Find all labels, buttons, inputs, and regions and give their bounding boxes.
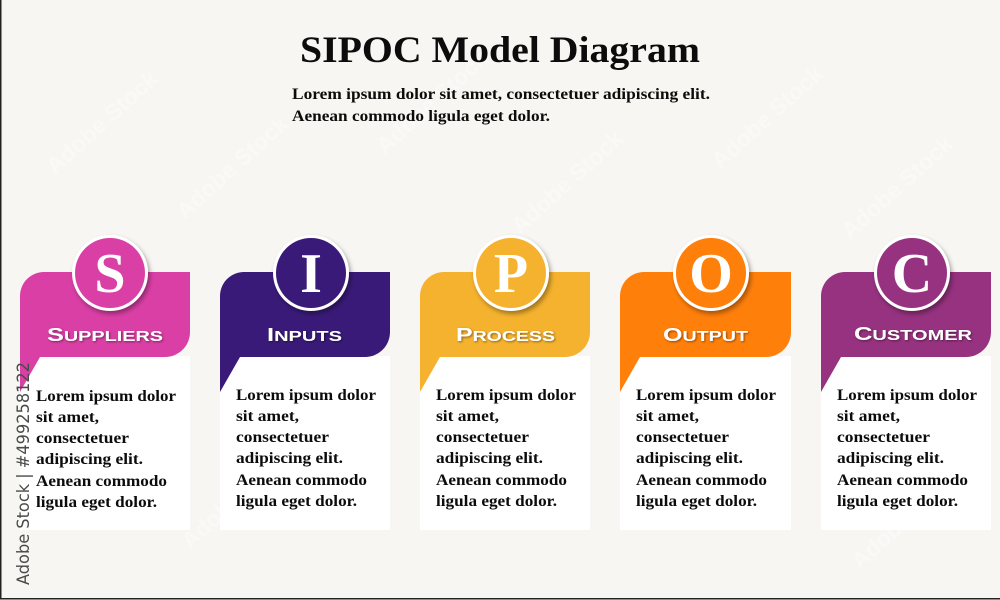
text block: sit amet, [636,408,699,425]
text block: consectetuer [36,430,129,447]
card body [420,356,590,530]
text block [36,388,176,511]
icon: letter S badge: S [94,243,126,305]
subtitle text: Aenean commodo ligula eget dolor. [292,108,550,125]
watermark pattern: Adobe Stock [706,60,828,174]
text block: sit amet, [236,408,299,425]
subtitle text: Lorem ipsum dolor sit amet, consectetuer adipiscing elit. [292,86,710,103]
heading: process: P ROCESS [456,324,555,345]
subtitle text [292,86,710,125]
card body [20,356,190,530]
text block: adipiscing elit. [36,451,143,468]
title: SIPOC Model Diagram [300,30,700,71]
header banner [20,272,190,392]
text block: Aenean commodo [436,472,567,489]
panel: process [420,235,590,530]
header banner [220,272,390,392]
text block: adipiscing elit. [236,450,343,467]
panel: customer [821,235,991,530]
text block: consectetuer [436,429,529,446]
header banner [420,272,590,392]
icon: letter I badge [273,235,349,311]
icon: letter O badge [673,235,749,311]
text block: Lorem ipsum dolor [636,387,776,404]
watermark pattern: Adobe Stock [41,65,163,179]
heading: output: O UTPUT [663,324,748,345]
text block: ligula eget dolor. [236,493,357,510]
icon: letter I badge: I [300,243,322,305]
watermark pattern: Adobe Stock [176,440,298,554]
text block: Lorem ipsum dolor [837,387,977,404]
card body [620,356,791,530]
text block: Aenean commodo [36,473,167,490]
panel: output [620,235,791,530]
icon: letter C badge [874,235,950,311]
text block: adipiscing elit. [837,450,944,467]
text block: Aenean commodo [837,472,968,489]
heading: inputs: INPUTS [267,324,342,345]
text block: adipiscing elit. [436,450,543,467]
panel: suppliers [20,235,190,530]
stock id vertical text: Adobe Stock | #499258122 [14,362,33,585]
watermark pattern: Adobe Stock [506,125,628,239]
text block: ligula eget dolor. [837,493,958,510]
text block: Lorem ipsum dolor [36,388,176,405]
panel: inputs [220,235,390,530]
text block: ligula eget dolor. [36,494,157,511]
watermark pattern: Adobe Stock [846,460,968,574]
text block: Lorem ipsum dolor [236,387,376,404]
watermark pattern: Adobe Stock [836,130,958,244]
watermark pattern: Adobe Stock [371,45,493,159]
text block: adipiscing elit. [636,450,743,467]
text block [236,387,376,510]
icon: letter P badge [473,235,549,311]
icon: letter S badge [72,235,148,311]
heading: customer: C USTOMER [854,323,973,344]
card body [821,356,991,530]
text block: Lorem ipsum dolor [436,387,576,404]
text block: sit amet, [36,409,99,426]
icon: letter O badge: O [689,243,733,305]
text block: sit amet, [436,408,499,425]
text block [636,387,776,510]
text block: Aenean commodo [636,472,767,489]
heading: suppliers: S UPPLIERS [47,324,163,345]
text block: ligula eget dolor. [436,493,557,510]
text block: Aenean commodo [236,472,367,489]
icon: letter P badge: P [494,243,528,305]
text block: consectetuer [636,429,729,446]
text block [837,387,977,510]
text block: ligula eget dolor. [636,493,757,510]
watermark pattern: Adobe Stock [171,110,293,224]
text block: consectetuer [837,429,930,446]
text block: sit amet, [837,408,900,425]
text block [436,387,576,510]
icon: letter C badge: C [892,243,932,305]
card body [220,356,390,530]
text block: consectetuer [236,429,329,446]
header banner [821,272,991,392]
header banner [620,272,791,392]
